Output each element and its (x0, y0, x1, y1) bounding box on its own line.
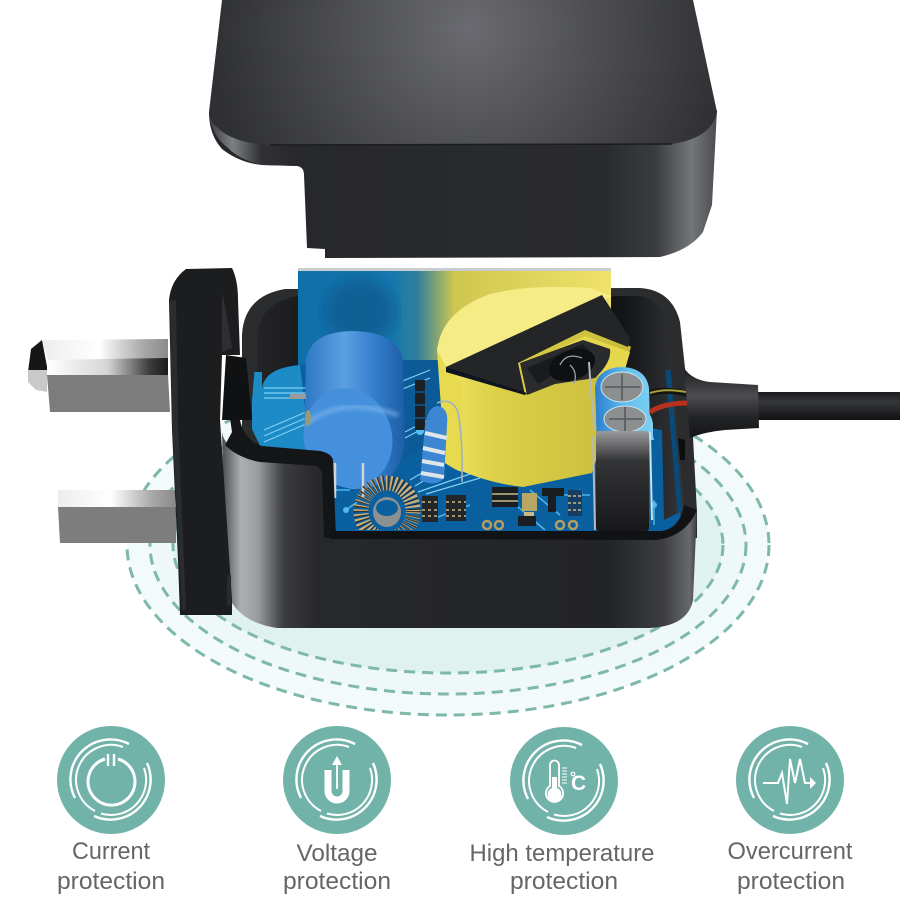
small capacitors (595, 367, 654, 440)
plug faceplate (169, 268, 252, 615)
power wires (650, 390, 688, 412)
circuit board and components (252, 287, 684, 539)
label: voltage protection (283, 840, 391, 895)
icon: overcurrent protection (736, 726, 844, 834)
smd components (415, 380, 582, 529)
label: current protection (57, 838, 165, 895)
transformer (437, 287, 631, 487)
adapter top cover (209, 0, 717, 258)
large capacitor (290, 331, 405, 498)
icon: voltage protection (283, 726, 391, 834)
label: overcurrent protection (728, 838, 853, 895)
label: overcurrent protection: protection (737, 868, 845, 895)
icon: high temperature protection: C (571, 772, 586, 795)
power cable (684, 368, 900, 438)
ferrite choke (596, 431, 652, 531)
lead wire (593, 436, 595, 530)
bottom plug pin (58, 490, 176, 543)
toroid inductor (361, 483, 413, 539)
housing back wall (242, 288, 697, 538)
icon: high temperature protection (510, 727, 618, 835)
concentric dashed protection field (127, 375, 769, 715)
housing right rim notch (678, 438, 685, 460)
label: current protection: protection (57, 868, 165, 895)
housing front wall (222, 418, 697, 628)
label: voltage protection: protection (283, 868, 391, 895)
icon: current protection (57, 726, 165, 834)
label: current protection: Current (72, 838, 150, 865)
label: high temperature protection (470, 840, 654, 895)
pcb (252, 360, 684, 532)
label: high temperature protection: protection (510, 868, 618, 895)
circuit board back reflection (298, 268, 611, 388)
top plug pin (28, 339, 170, 412)
label: voltage protection: Voltage (296, 840, 378, 867)
resistor (420, 401, 462, 484)
label: high temperature protection: High temperature (470, 840, 654, 867)
label: overcurrent protection: Overcurrent (728, 838, 853, 865)
